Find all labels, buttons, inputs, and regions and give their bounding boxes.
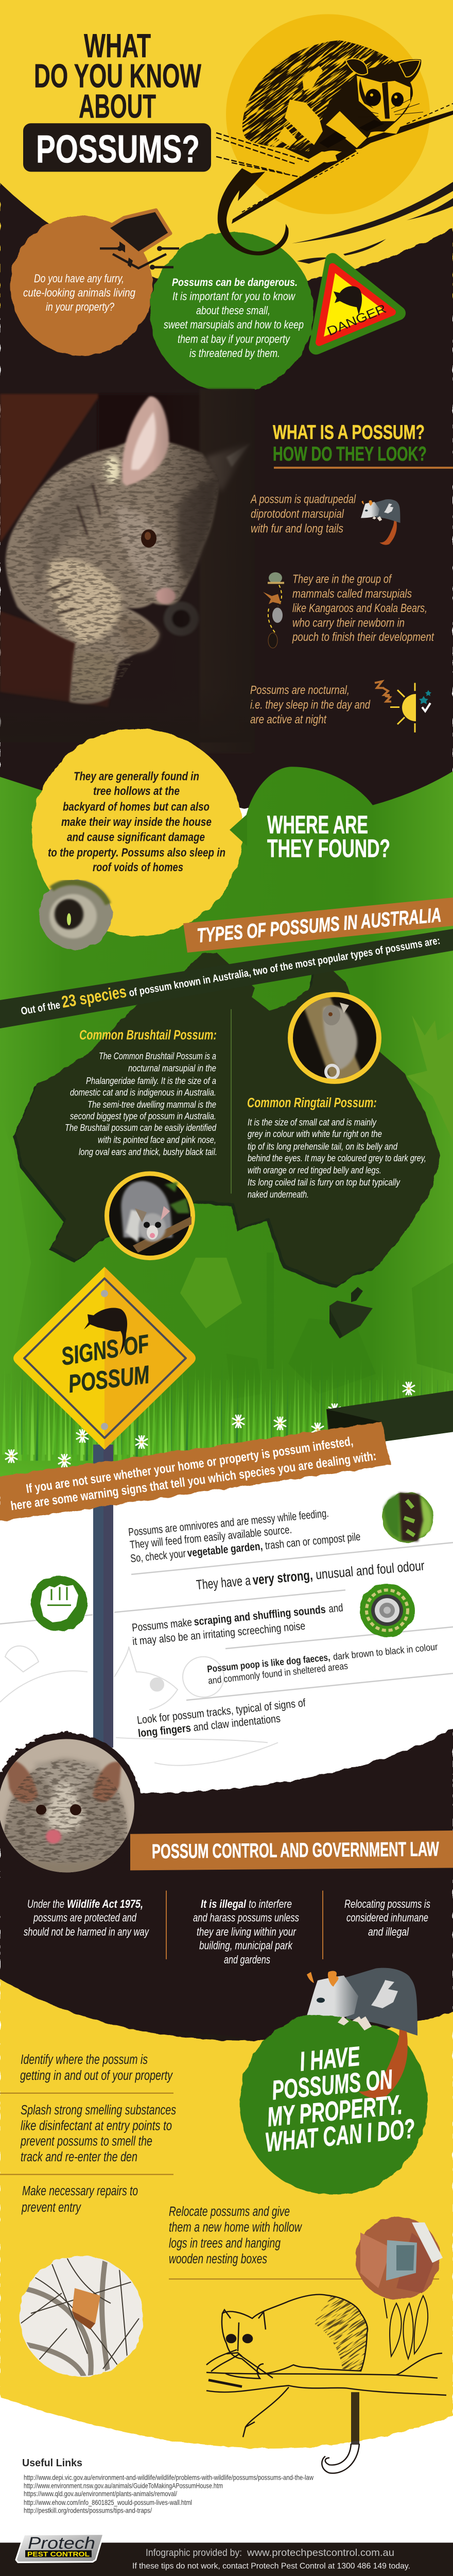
yellow speech bubble: and cause significant damage bbox=[67, 831, 205, 844]
column: illegal to harass: and gardens bbox=[224, 1953, 270, 1966]
text block: splash: like disinfectant at entry points to bbox=[21, 2119, 172, 2133]
sign: omnivores: They will feed from easily available source. bbox=[129, 1523, 292, 1551]
icon: danger sign: DANGER bbox=[325, 302, 389, 338]
icon: danger sign bbox=[316, 260, 398, 348]
heading: where are they found bbox=[267, 811, 390, 863]
text block: splash: prevent possums to smell the bbox=[20, 2134, 152, 2149]
panel: danger callout circle bbox=[150, 232, 313, 393]
sign post bbox=[93, 1445, 113, 1748]
heading: where are they found: WHERE ARE bbox=[267, 811, 368, 839]
ribbon: warning signs intro: If you are not sure whether your home or property is possum infested, bbox=[25, 1434, 354, 1496]
sign: droppings: Possum poop is like dog faeces, bbox=[206, 1652, 330, 1674]
photo: brushtail possum bbox=[104, 1172, 195, 1260]
illustration: large possum bbox=[305, 1968, 417, 2098]
illustration: leaves bbox=[384, 2296, 428, 2359]
divider between species bbox=[231, 1009, 232, 1194]
text block: relocate: them a new home with hollow bbox=[169, 2221, 302, 2234]
text block: splash bbox=[20, 2103, 176, 2164]
sign: odour bbox=[196, 1558, 425, 1592]
text block: quadrupedal: with fur and long tails bbox=[251, 522, 343, 535]
sign: omnivores bbox=[128, 1506, 361, 1565]
useful links: http://pestkill.org/rodents/possums/tips-and-traps/ bbox=[24, 2506, 152, 2514]
title: DO YOU KNOW bbox=[34, 57, 201, 94]
icon: half sun with sleep marks bbox=[375, 682, 431, 733]
photo: tree hollow bbox=[39, 880, 112, 950]
sign: sounds: and bbox=[328, 1601, 344, 1615]
sign: sounds bbox=[131, 1601, 344, 1648]
text block: nocturnal bbox=[250, 683, 371, 726]
column: wildlife act: Wildlife Act 1975, bbox=[67, 1897, 143, 1910]
logo: Protech Pest Control bbox=[16, 2533, 103, 2563]
panel: common brushtail possum bbox=[65, 1028, 217, 1157]
column: illegal to harass: building, municipal park bbox=[199, 1939, 293, 1952]
text block: repairs: prevent entry bbox=[21, 2200, 82, 2215]
panel: common brushtail possum: The semi-tree dwelling mammal is the bbox=[88, 1099, 216, 1110]
column: illegal to harass: It is illegal bbox=[201, 1897, 247, 1910]
heading: what is a possum bbox=[273, 421, 453, 469]
photo: possum close-up bbox=[0, 389, 255, 753]
icons: marsupial animals bbox=[263, 572, 284, 648]
panel: common brushtail possum: The Common Brushtail Possum is a bbox=[99, 1050, 216, 1061]
panel: question circle: in your property? bbox=[46, 300, 114, 313]
panel: common ringtail possum: Common Ringtail Possum: bbox=[247, 1096, 377, 1110]
text block: marsupial group: mammals called marsupials bbox=[292, 587, 412, 601]
dark section background bbox=[0, 182, 453, 808]
text block: quadrupedal: A possum is quadrupedal bbox=[250, 493, 356, 506]
useful links bbox=[22, 2457, 314, 2514]
text block: nocturnal: Possums are nocturnal, bbox=[250, 683, 350, 697]
illustration: ringtail line drawing bbox=[206, 2272, 446, 2473]
map of Australia bbox=[13, 952, 441, 1338]
column: relocating: and illegal bbox=[368, 1925, 409, 1938]
text block: nocturnal: are active at night bbox=[250, 713, 327, 726]
text block: quadrupedal bbox=[250, 493, 356, 535]
column: relocating bbox=[344, 1897, 430, 1938]
icon: fist bbox=[31, 1576, 88, 1632]
column: wildlife act: possums are protected and bbox=[33, 1911, 137, 1924]
yellow speech bubble: backyard of homes but can also bbox=[63, 800, 210, 814]
yellow speech bubble: tree hollows at the bbox=[93, 784, 180, 798]
forest silhouettes bbox=[0, 1015, 453, 1399]
sign: omnivores: So, check your bbox=[130, 1547, 186, 1565]
column: illegal to harass: to interfere bbox=[249, 1897, 292, 1910]
panel: danger callout circle: It is important for you to know bbox=[172, 290, 295, 302]
title: POSSUMS? bbox=[36, 127, 200, 172]
sign: odour: very strong, bbox=[252, 1567, 313, 1588]
text block: marsupial group bbox=[292, 572, 434, 644]
dividers: signs bbox=[0, 1543, 453, 1700]
panel: danger callout circle: them at bay if your property bbox=[178, 332, 290, 346]
banner: possum control bbox=[130, 1831, 453, 1870]
title bbox=[23, 27, 211, 172]
divider bbox=[322, 1891, 323, 1959]
ribbon: warning signs intro bbox=[0, 1391, 453, 1521]
footer: If these tips do not work, contact Protech Pest Control at 1300 486 149 today. bbox=[132, 2562, 410, 2570]
useful links: https://www.qld.gov.au/environment/plants-animals/removal/ bbox=[24, 2489, 177, 2498]
panel: common brushtail possum: long oval ears and thick, bushy black tail. bbox=[79, 1146, 217, 1157]
yellow speech bubble: to the property. Possums also sleep in bbox=[48, 846, 225, 860]
sun circle behind possum bbox=[226, 14, 430, 214]
text block: quadrupedal: diprotodont marsupial bbox=[251, 507, 344, 521]
sign: omnivores: vegetable garden, bbox=[186, 1539, 263, 1560]
column: wildlife act: should not be harmed in any way bbox=[24, 1925, 149, 1938]
dark law section background bbox=[0, 1728, 453, 2050]
panel: common brushtail possum: Common Brushtail Possum: bbox=[79, 1028, 217, 1043]
panel: danger callout circle: is threatened by them. bbox=[189, 346, 280, 360]
panel: question circle: Do you have any furry, bbox=[34, 272, 124, 285]
text block: relocate: logs in trees and hanging bbox=[169, 2236, 281, 2251]
text block: identify bbox=[20, 2053, 173, 2083]
road sign: signs of possum: POSSUM bbox=[67, 1361, 151, 1398]
sign: tracks: Look for possum tracks, typical of signs of bbox=[136, 1696, 306, 1726]
text block: marsupial group: They are in the group of bbox=[292, 572, 392, 586]
panel: common brushtail possum: The Brushtail possum can be easily identified bbox=[65, 1122, 216, 1133]
heading: where are they found: THEY FOUND? bbox=[267, 835, 390, 863]
yellow speech bubble: They are generally found in bbox=[74, 770, 199, 784]
dark band: species intro bbox=[0, 929, 453, 1028]
title: ABOUT bbox=[79, 88, 156, 125]
panel: danger callout circle: about these small, bbox=[196, 303, 270, 317]
title: WHAT bbox=[84, 27, 151, 64]
panel: danger callout circle: Possums can be dangerous. bbox=[172, 276, 298, 289]
photo: vegetable garden bbox=[382, 1492, 433, 1543]
sign: sounds: Possums make bbox=[131, 1616, 193, 1634]
panel: common ringtail possum: naked underneath. bbox=[248, 1189, 309, 1199]
icon: small possum bbox=[361, 499, 400, 545]
useful links: http://www.ehow.com/info_8601825_would-possum-lives-wall.html bbox=[24, 2498, 192, 2506]
green section background bbox=[0, 767, 453, 1495]
icon: house bbox=[100, 210, 179, 270]
panel: common brushtail possum: Phalangeridae family. It is the size of a bbox=[86, 1075, 216, 1086]
text block: relocate bbox=[169, 2205, 302, 2266]
panel: what can I do bbox=[239, 2014, 428, 2195]
panel: danger callout circle: sweet marsupials and how to keep bbox=[164, 317, 304, 331]
sign: droppings bbox=[206, 1641, 438, 1686]
footer: Infographic provided by: bbox=[146, 2547, 242, 2558]
panel: common ringtail possum bbox=[247, 1096, 426, 1199]
column: wildlife act: Under the bbox=[27, 1897, 64, 1910]
panel: common ringtail possum: It is the size of small cat and is mainly bbox=[248, 1116, 377, 1127]
panel: common ringtail possum: Its long coiled tail is furry on top but typically bbox=[248, 1177, 400, 1188]
column: illegal to harass: they are living within your bbox=[197, 1925, 297, 1938]
text block: relocate: Relocate possums and give bbox=[169, 2205, 290, 2219]
logo: Protech Pest Control: PEST CONTROL bbox=[27, 2550, 90, 2558]
footer bbox=[0, 2543, 453, 2576]
faint possum sketch bbox=[0, 1646, 278, 1766]
text block: identify: Identify where the possum is bbox=[21, 2053, 148, 2067]
panel: common ringtail possum: tip of its long prehensile tail, on its belly and bbox=[248, 1141, 397, 1151]
sign: omnivores: Possums are omnivores and are messy while feeding. bbox=[128, 1506, 329, 1538]
panel: common brushtail possum: with its pointed face and pink nose, bbox=[98, 1134, 216, 1145]
sign: tracks: long fingers bbox=[137, 1721, 191, 1739]
divider bbox=[0, 2093, 173, 2094]
column: wildlife act bbox=[24, 1897, 149, 1938]
text block: repairs bbox=[21, 2184, 138, 2215]
sign: sounds: it may also be an irritating screeching noise bbox=[132, 1619, 306, 1648]
panel: common ringtail possum: with orange or red tinged belly and legs. bbox=[248, 1165, 381, 1175]
illustration: possum on branch bbox=[187, 0, 453, 256]
panel: common brushtail possum: nocturnal marsupial in the bbox=[128, 1063, 216, 1073]
dark band: species intro: 23 species bbox=[60, 982, 128, 1011]
road sign: signs of possum: SIGNS OF bbox=[59, 1329, 152, 1371]
text block: repairs: Make necessary repairs to bbox=[22, 2184, 138, 2198]
useful links: http://www.environment.nsw.gov.au/animals/GuideToMakingAPossumHouse.htm bbox=[24, 2482, 223, 2489]
text block: splash: Splash strong smelling substances bbox=[21, 2103, 176, 2117]
road sign: signs of possum bbox=[13, 1267, 196, 1450]
panel: question circle: cute-looking animals living bbox=[23, 286, 135, 299]
grass bbox=[0, 1364, 449, 1477]
footer: www.protechpestcontrol.com.au bbox=[247, 2547, 394, 2558]
flowers bbox=[6, 1382, 414, 1467]
useful links: Useful Links bbox=[22, 2457, 82, 2469]
white signs background bbox=[0, 1432, 453, 1768]
useful links: http://www.depi.vic.gov.au/environment-and-wildlife/wildlife/problems-with-wildlife/possums/possums-and-the-law bbox=[24, 2473, 314, 2482]
panel: common brushtail possum: domestic cat and is indigenous in Australia. bbox=[70, 1087, 216, 1097]
yellow speech bubble: make their way inside the house bbox=[61, 815, 212, 829]
text block: identify: getting in and out of your property bbox=[20, 2069, 173, 2083]
divider bbox=[0, 2174, 173, 2175]
text block: splash: track and re-enter the den bbox=[21, 2150, 137, 2164]
yellow action section background bbox=[0, 1979, 453, 2448]
sign: odour: unusual and foul odour bbox=[315, 1558, 425, 1582]
text block: marsupial group: who carry their newborn in bbox=[292, 616, 405, 630]
sign: droppings: and commonly found in sheltered areas bbox=[207, 1660, 349, 1686]
panel: what can I do: I HAVE bbox=[298, 2041, 362, 2077]
photo: ringtail possum bbox=[288, 992, 381, 1084]
panel: question circle bbox=[10, 216, 152, 355]
logo: Protech Pest Control: Protech bbox=[28, 2533, 95, 2552]
photo: possum face in circle bbox=[0, 1733, 141, 1884]
photo: nest box in tree bbox=[20, 2256, 144, 2379]
sign: tracks bbox=[136, 1696, 306, 1739]
sign: tracks: and claw indentations bbox=[193, 1711, 281, 1734]
divider bbox=[169, 2279, 439, 2280]
column: illegal to harass: and harass possums unless bbox=[193, 1911, 299, 1924]
dark band: species intro: Out of the bbox=[20, 999, 61, 1017]
panel: common ringtail possum: grey in colour with white fur right on the bbox=[248, 1128, 382, 1139]
brush stroke on yellow edge bbox=[160, 2029, 252, 2040]
yellow speech bubble: roof voids of homes bbox=[93, 860, 183, 874]
sign: sounds: scraping and shuffling sounds bbox=[193, 1603, 326, 1628]
sign: odour: They have a bbox=[196, 1573, 251, 1592]
photo: roof tile vent bbox=[356, 2217, 443, 2300]
column: illegal to harass bbox=[193, 1897, 299, 1966]
yellow speech bubble bbox=[32, 729, 247, 936]
icon: speaker bbox=[360, 1584, 414, 1637]
text block: nocturnal: i.e. they sleep in the day and bbox=[250, 698, 371, 711]
panel: common brushtail possum: second biggest type of possum in Australia. bbox=[70, 1111, 216, 1122]
text block: relocate: wooden nesting boxes bbox=[169, 2252, 267, 2266]
yellow header background bbox=[0, 0, 453, 313]
divider bbox=[166, 1891, 167, 1959]
sign: omnivores: trash can or compost pile bbox=[265, 1530, 361, 1552]
